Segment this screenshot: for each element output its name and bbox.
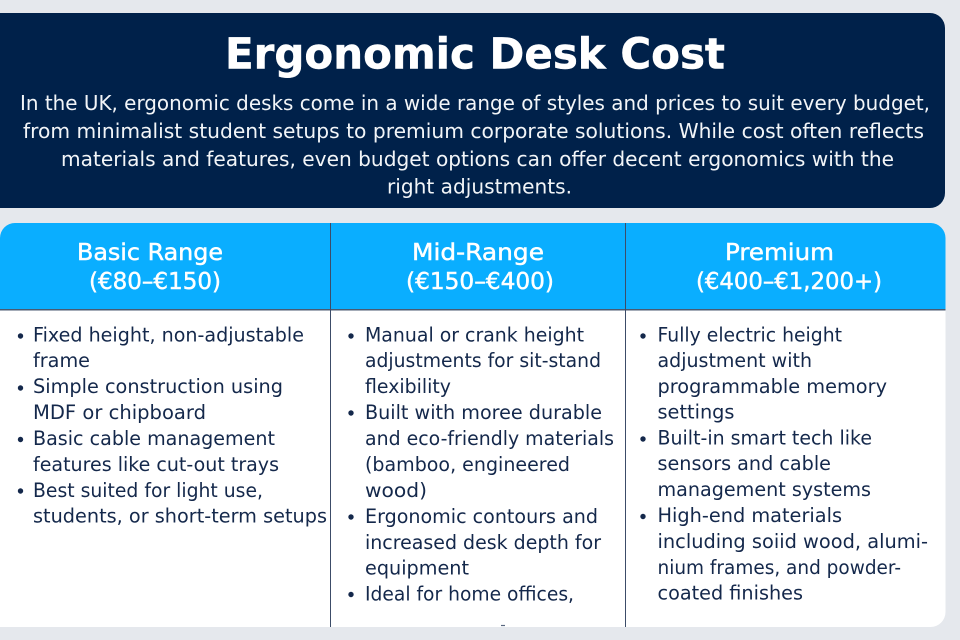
column: basic range features: frame — [33, 349, 90, 372]
column: mid-range features: increased desk depth for — [365, 531, 602, 554]
intro paragraph: materials and features, even budget options can offer decent ergonomics with the — [61, 147, 894, 171]
intro paragraph: right adjustments. — [387, 174, 572, 198]
column: basic range features: MDF or chipboard — [33, 401, 206, 424]
column: basic range features: Basic cable management — [33, 427, 275, 450]
column: basic range features: features like cut-out trays — [33, 453, 279, 476]
column: mid-range features: flexibility — [365, 375, 451, 398]
column: premium features: Fully electric height — [658, 324, 842, 346]
heading: premium — [696, 240, 882, 295]
heading: basic range — [77, 240, 223, 295]
column: premium features: sensors and cable — [658, 452, 831, 475]
column: mid-range features: and eco-friendly materials — [365, 427, 614, 450]
column: premium features: settings — [658, 400, 734, 424]
header panel — [0, 13, 945, 208]
heading: basic range: (€80–€150) — [89, 269, 221, 295]
intro paragraph — [20, 91, 930, 198]
column: mid-range features: Manual or crank height — [365, 324, 584, 346]
comparison table — [0, 223, 946, 627]
column: premium features: Built-in smart tech like — [658, 426, 872, 450]
column: mid-range features: adjustments for sit-stand — [365, 349, 601, 372]
table header band — [0, 223, 946, 309]
title: Ergonomic Desk Cost — [225, 29, 725, 79]
column: premium features: adjustment with — [658, 349, 812, 372]
column: premium features: coated finishes — [658, 582, 803, 604]
heading: premium: Premium — [725, 240, 834, 266]
column: premium features: management systems — [658, 478, 871, 501]
heading: basic range: Basic Range — [77, 240, 223, 266]
heading: mid-range: Mid-Range — [412, 240, 544, 266]
column: premium features: programmable memory — [658, 375, 887, 398]
column: basic range features: students, or short-term setups — [33, 504, 327, 528]
table body — [0, 309, 946, 627]
column: mid-range features — [348, 324, 614, 626]
column: mid-range features: Ergonomic contours and — [365, 505, 598, 528]
column: premium features: nium frames, and powder- — [658, 556, 901, 579]
column: basic range features: Simple construction using — [33, 375, 283, 398]
column: premium features: including soiid wood, alumi- — [658, 530, 928, 553]
intro paragraph: from minimalist student setups to premium corporate solutions. While cost often reflects — [23, 119, 924, 143]
intro paragraph: In the UK, ergonomic desks come in a wide range of styles and prices to suit every budget, — [20, 91, 930, 115]
column: mid-range features: equipment — [365, 556, 469, 580]
column: premium features: High-end materials — [658, 504, 842, 527]
heading: premium: (€400–€1,200+) — [696, 269, 882, 295]
column: mid-range features: wood) — [365, 479, 427, 502]
heading: mid-range: (€150–€400) — [406, 269, 554, 295]
column: mid-range features: (bamboo, engineered — [365, 453, 570, 476]
column: basic range features: Best suited for light use, — [33, 479, 263, 502]
column: basic range features: Fixed height, non-adjustable — [33, 324, 304, 346]
column: mid-range features: Built with moree durable — [365, 401, 602, 424]
column: mid-range features: Ideal for home offices, — [365, 582, 574, 606]
column: basic range features — [18, 324, 327, 528]
column: premium features — [640, 324, 928, 604]
heading: mid-range — [406, 240, 554, 295]
